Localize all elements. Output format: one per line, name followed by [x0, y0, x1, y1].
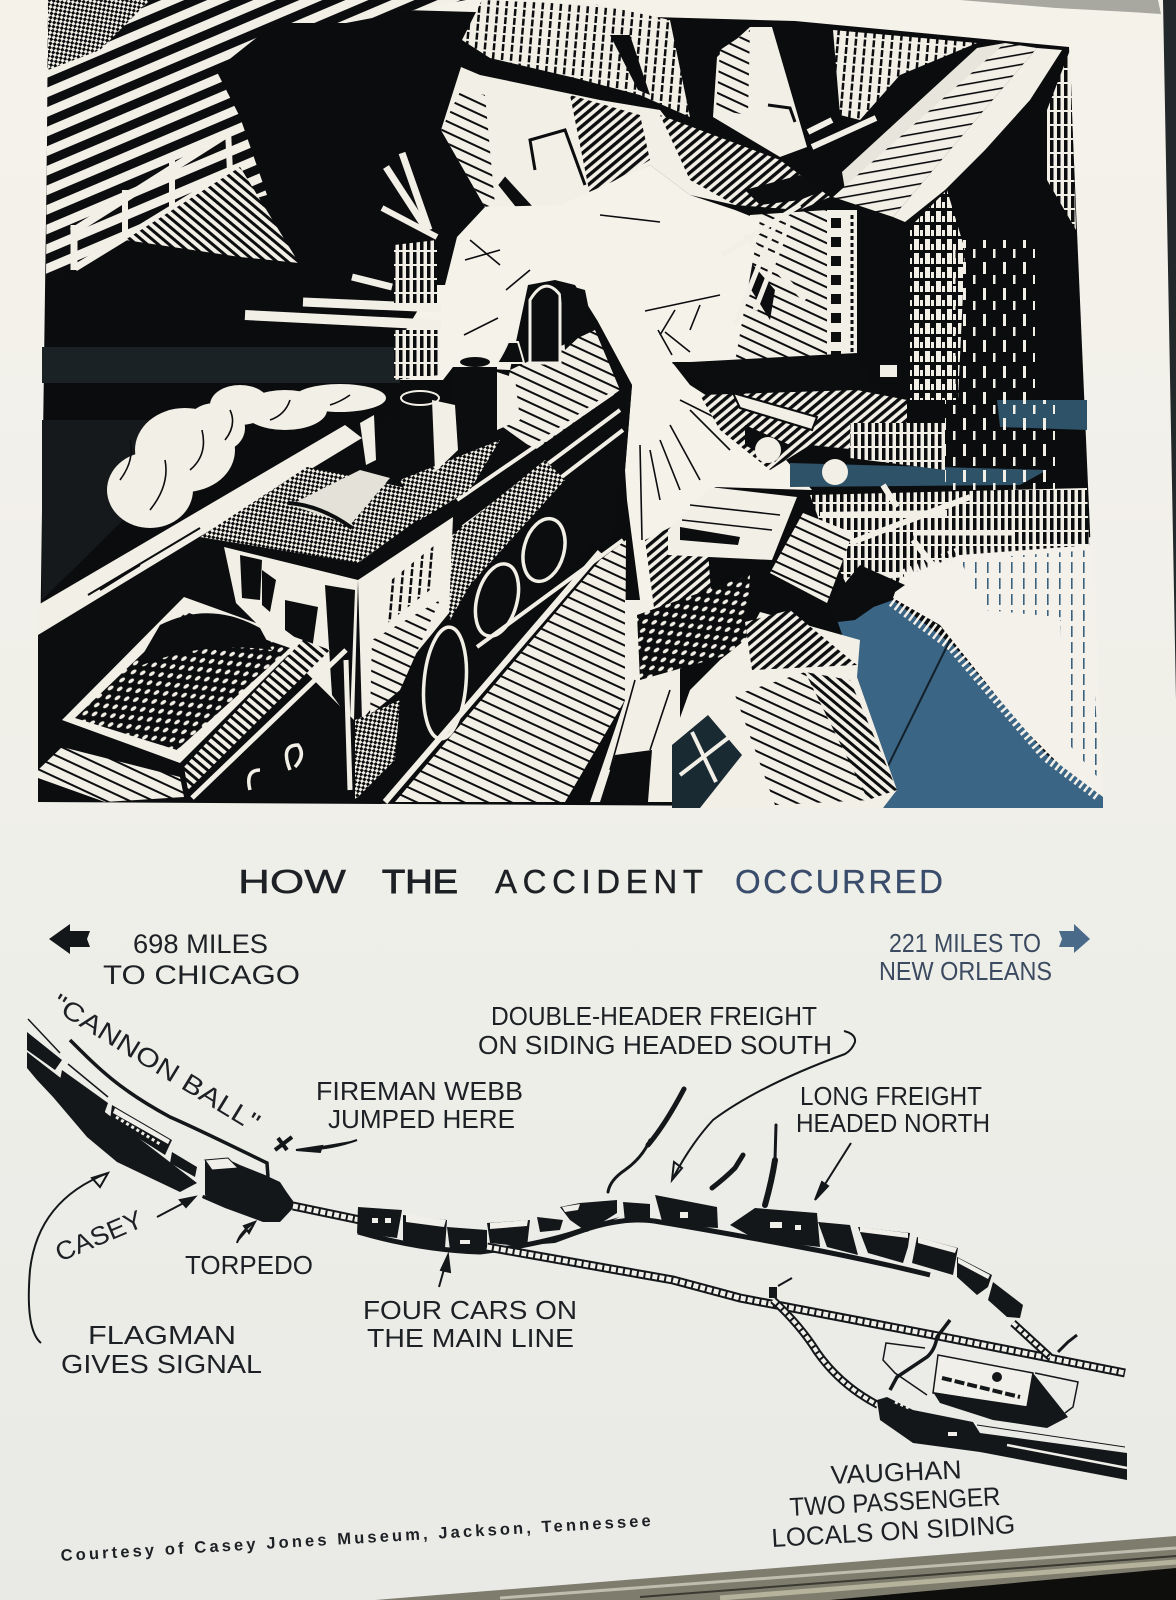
black band under tank [672, 353, 880, 400]
panel one lines [680, 505, 780, 545]
label: Fireman Webb: JUMPED HERE [328, 1104, 515, 1134]
label: miles to New Orleans [879, 928, 1052, 986]
blast hatch lines [464, 215, 760, 540]
blast debris rays on dark [245, 153, 441, 325]
label: long freight: LONG FREIGHT [800, 1081, 982, 1111]
freight train on siding [357, 1195, 1023, 1318]
white explosion core [400, 165, 812, 600]
tender frame [62, 597, 303, 763]
speckled bank under fence [125, 167, 299, 263]
label: miles to Chicago: 698 MILES [133, 929, 268, 959]
heading: THE [382, 863, 458, 900]
falling speck over blue [945, 400, 1055, 490]
splintered timbers [820, 485, 1013, 583]
cab roof [200, 467, 449, 563]
approach track [293, 1206, 360, 1220]
label: Vaughan: LOCALS ON SIDING [771, 1509, 1016, 1553]
debris panel two [770, 513, 853, 603]
white side lines of tender [192, 650, 350, 798]
highlights on freight cars [372, 1204, 990, 1279]
label: double-header freight: DOUBLE-HEADER FREIGHT [491, 1001, 817, 1031]
black doorway [857, 213, 908, 390]
boiler check plating [400, 440, 500, 520]
tender side hatch [184, 640, 330, 790]
car roof hatch [745, 610, 857, 670]
label: Casey: CASEY [51, 1204, 147, 1268]
switch stands [773, 1278, 1077, 1352]
smoke shading [120, 395, 350, 510]
label: double-header freight [478, 1001, 832, 1060]
wheel at bottom centre [600, 750, 652, 802]
tank hatched wall [730, 210, 827, 362]
label: double-header freight: ON SIDING HEADED SOUTH [478, 1030, 832, 1060]
black debris below panels [827, 565, 905, 622]
black gash under roof wreck [745, 175, 825, 205]
roof wreck below tower [660, 115, 830, 210]
house roof hatch [570, 95, 650, 195]
dark wheel shadow near track [582, 465, 618, 545]
house dark beam [497, 175, 560, 245]
wreck at right of blast [700, 390, 907, 470]
train smoke trail [70, 1040, 268, 1177]
heading [238, 863, 943, 900]
blue sky patches [790, 400, 1087, 487]
cab roof vent [288, 470, 390, 528]
car end boards [805, 672, 897, 800]
tower hatch [716, 30, 795, 122]
stacks and dome [360, 283, 592, 472]
speckle beside track [833, 30, 977, 120]
lower wrecked car body [672, 612, 897, 808]
speckled dense column [910, 190, 965, 400]
arrow: flagman [29, 1173, 108, 1343]
window cross [680, 732, 728, 782]
siding branch [773, 1300, 878, 1405]
blue pool [837, 600, 1103, 808]
wheel chain [733, 393, 817, 430]
board shadow lines [88, 528, 200, 595]
arrow: long freight [815, 1143, 851, 1200]
house hatch left wall [441, 90, 495, 207]
label: flagman: FLAGMAN [88, 1320, 236, 1350]
cab front wall [224, 547, 358, 720]
label: torpedo: TORPEDO [185, 1250, 313, 1280]
timber band [810, 488, 1090, 592]
arrow: torpedo [237, 1222, 255, 1243]
small wall hatch left of blast [394, 240, 440, 380]
locomotive smoke plumes [608, 1089, 776, 1205]
label: Fireman Webb: FIREMAN WEBB [316, 1076, 523, 1106]
label: miles to New Orleans: 221 MILES TO [889, 928, 1041, 958]
heading: OCCURRED [735, 863, 943, 900]
boiler rails [453, 393, 623, 647]
side check plating [440, 460, 565, 620]
hatch at top right [1047, 50, 1076, 230]
crossover to freight [1013, 1323, 1050, 1357]
label: long freight [796, 1081, 990, 1138]
label: flagman [61, 1320, 262, 1379]
lantern square [880, 365, 897, 377]
label: Vaughan [771, 1454, 1016, 1553]
cab wall dark panels [240, 555, 355, 720]
car window [672, 715, 742, 808]
label: long freight: HEADED NORTH [796, 1108, 990, 1138]
railway track [833, 43, 1037, 217]
pool reflection line [887, 640, 950, 768]
arrow: Casey [157, 1197, 195, 1217]
coal shadow [135, 613, 272, 668]
ragged top of glare [905, 546, 1093, 578]
speckled hillside at top centre [462, 0, 690, 117]
x mark [275, 1137, 292, 1150]
smoke cloud [107, 384, 386, 528]
arrow to Chicago [49, 924, 90, 954]
frame: top edge [960, 0, 1161, 14]
label: miles to New Orleans: NEW ORLEANS [879, 956, 1052, 986]
frame: right edge [1163, 0, 1176, 700]
car side boards [735, 672, 870, 805]
hatch of centre debris [645, 510, 712, 615]
track left shoulder [842, 43, 1005, 190]
arrow: four cars [439, 1255, 450, 1287]
running board [38, 425, 362, 635]
bottom corner black [38, 778, 105, 802]
heading: ACCIDENT [495, 863, 703, 900]
boiler hatching [500, 330, 620, 450]
lines on boards [610, 680, 670, 770]
finer shingles at the roof corner [48, 0, 150, 70]
blue hatch on glare [960, 550, 1100, 780]
wrecked house [441, 67, 735, 207]
white beams by tower [808, 118, 876, 147]
label: flagman: GIVES SIGNAL [61, 1349, 262, 1379]
crossing timbers [722, 205, 805, 325]
sparse snow [947, 240, 1035, 400]
debris panel one [668, 487, 797, 560]
track right shoulder [893, 48, 1062, 222]
arrow: double-header [672, 1031, 855, 1180]
Cannon Ball passenger train [27, 1019, 296, 1222]
main line track [487, 1247, 1125, 1373]
black wedge behind timbers [740, 250, 775, 320]
heading: HOW [238, 863, 347, 900]
night sky base [38, 0, 1102, 808]
ladder on tank [827, 210, 857, 365]
label: four cars: FOUR CARS ON [363, 1295, 577, 1325]
label: miles to Chicago [103, 929, 300, 990]
locomotive body [38, 320, 632, 802]
upturned wheels [755, 437, 848, 485]
house door frame [530, 130, 585, 185]
credit line: Courtesy of Casey Jones Museum, Jackson, Tennessee [60, 1512, 651, 1565]
ground glare lower right [893, 545, 1103, 797]
trackbed rail [385, 552, 600, 802]
black under chain [745, 425, 790, 462]
label: four cars [363, 1295, 577, 1353]
label: Vaughan: VAUGHAN [830, 1454, 962, 1490]
cab side detail [370, 545, 440, 715]
illustration: train collision engraving [38, 0, 1103, 808]
trackbed [395, 540, 626, 802]
label: Cannon Ball: "CANNON BALL" [47, 988, 265, 1137]
black debris patch [637, 575, 750, 680]
Vaughan station [883, 1343, 1078, 1428]
scroll ornaments on tender side [249, 745, 301, 790]
arrow to New Orleans [1059, 924, 1090, 953]
label: four cars: THE MAIN LINE [367, 1323, 574, 1353]
lower centre boards [590, 600, 680, 802]
frame: bottom band [375, 1536, 1176, 1600]
track diagram [27, 1019, 1127, 1480]
black spikes on hillside [610, 35, 650, 95]
tender coal [75, 612, 290, 750]
label: Fireman Webb [316, 1076, 523, 1134]
dusk bands at left [42, 347, 400, 600]
tender front lower [38, 747, 184, 802]
snow drips [850, 423, 945, 470]
roof at upper left [46, 0, 466, 280]
fence rails [72, 130, 235, 270]
passenger locals on siding [877, 1397, 1127, 1480]
label: miles to Chicago: TO CHICAGO [103, 960, 300, 990]
ragged shoreline [893, 600, 1100, 795]
arrow: Webb [296, 1140, 357, 1152]
driving wheels [419, 514, 572, 741]
church tower [713, 27, 807, 157]
wire curve by station [890, 1320, 950, 1390]
label: Vaughan: TWO PASSENGER [789, 1481, 1001, 1522]
chassis speck under cab [355, 700, 400, 800]
cab side wall [358, 517, 453, 720]
